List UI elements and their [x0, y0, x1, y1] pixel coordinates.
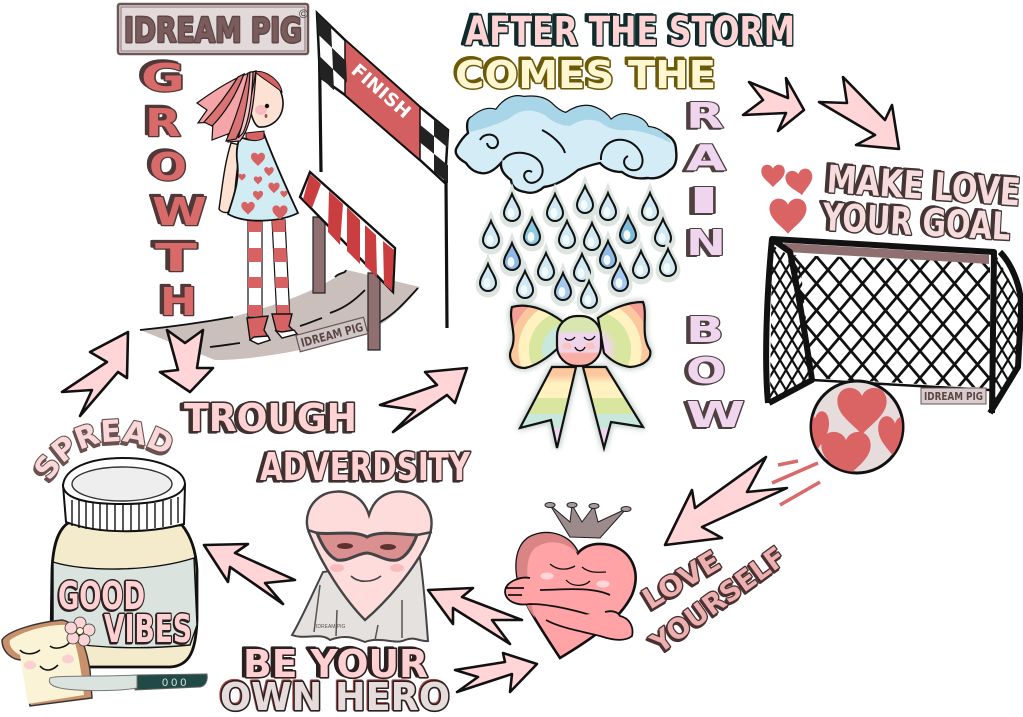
heading: GROWTH vertical letters: H	[160, 280, 197, 324]
jar body	[51, 523, 197, 667]
heading: Spread: SPREAD	[33, 418, 173, 484]
arrow: love to hero upper	[428, 588, 522, 644]
toast	[2, 617, 95, 706]
heading: RAINBOW vertical letters: A	[686, 138, 726, 179]
arrow: rainbow to goal 1	[743, 78, 804, 131]
jar text: good vibes: GOOD	[58, 574, 145, 618]
small logo on goal: IDREAM PIG	[924, 390, 983, 403]
hugging arms	[505, 578, 632, 640]
road	[140, 270, 420, 360]
cape folds	[314, 585, 402, 640]
heading: GROWTH vertical letters: W	[152, 190, 207, 234]
heading: RAINBOW vertical letters: O	[686, 351, 726, 392]
arrow: growth to trough	[160, 330, 213, 392]
masked hero heart	[292, 491, 432, 642]
heart face	[540, 564, 610, 588]
arrow: ball to heart	[665, 457, 787, 545]
girl hair	[197, 71, 256, 142]
heading: RAINBOW vertical letters	[686, 96, 745, 436]
speed lines	[772, 461, 820, 505]
face details	[330, 564, 404, 581]
cape	[292, 558, 428, 642]
knife: 000	[162, 677, 189, 689]
girl head	[249, 72, 283, 127]
girl shoes	[247, 314, 297, 344]
crown	[545, 502, 631, 538]
logo: IDream Pig	[118, 4, 308, 54]
girl dress	[228, 131, 298, 221]
jar of good vibes	[51, 458, 197, 667]
knife	[49, 674, 207, 691]
finish banner	[317, 13, 448, 183]
hearts	[761, 165, 815, 234]
mask	[308, 530, 432, 560]
tiny logo on cape: IDREAM PIG	[316, 624, 346, 630]
arrow: spread to growth	[62, 332, 128, 416]
finish poles	[319, 15, 447, 328]
rainbow bow	[510, 302, 650, 448]
flower	[65, 617, 95, 646]
finish banner: FINISH	[347, 60, 415, 123]
jar label	[53, 558, 197, 648]
heading: Love yourself: YOURSELF	[644, 540, 792, 660]
crossbar	[784, 243, 989, 264]
heart body	[517, 533, 636, 658]
heading: Be your own hero	[220, 642, 450, 717]
small logo on goal	[921, 388, 986, 404]
soccer ball	[810, 380, 904, 474]
goal frame	[766, 239, 1021, 413]
bow knot with face	[557, 316, 601, 366]
heading: GROWTH vertical letters	[141, 56, 207, 324]
heading: Trough adversity	[184, 396, 470, 489]
cloud	[456, 96, 676, 193]
jar text: good vibes	[58, 574, 192, 651]
girl legs	[248, 220, 290, 317]
heading: GROWTH vertical letters: G	[141, 56, 185, 100]
heading: Trough adversity: TROUGH	[184, 396, 357, 440]
logo: IDream Pig: IDREAM PIG	[124, 11, 302, 51]
heading: Be your own hero: BE YOUR	[243, 642, 428, 686]
girl figure	[197, 71, 298, 344]
heading: RAINBOW vertical letters: W	[686, 395, 745, 436]
heading: Trough adversity: ADVERDSITY	[260, 445, 470, 489]
heading: Love yourself: LOVE	[637, 544, 726, 616]
heading: RAINBOW vertical letters: N	[686, 223, 726, 264]
logo: IDream Pig: ©	[299, 7, 308, 21]
heading: RAINBOW vertical letters: I	[686, 181, 722, 222]
arrow: rainbow to goal 2	[819, 77, 899, 149]
arrow: adversity to storm	[380, 368, 467, 432]
jar lid	[63, 458, 185, 531]
heading: GROWTH vertical letters: T	[155, 236, 197, 280]
heading: After the storm: AFTER THE STORM	[465, 9, 795, 55]
goal net back	[787, 255, 990, 388]
arrow: hero to love lower	[455, 653, 537, 692]
heading: GROWTH vertical letters: O	[149, 145, 187, 189]
soccer goal	[766, 239, 1021, 413]
heart	[307, 491, 432, 620]
heading: RAINBOW vertical letters: R	[686, 96, 724, 137]
heading: Make love your goal	[821, 157, 1022, 249]
girl arm	[219, 143, 240, 213]
barrier	[300, 172, 395, 350]
bow wings	[510, 302, 650, 368]
arrow: hero to jar	[204, 544, 295, 604]
small logo on road: IDREAM PIG	[299, 320, 365, 350]
hugging heart with crown	[505, 502, 636, 658]
heading: Comes the: COMES THE	[455, 53, 716, 97]
jar text: good vibes: VIBES	[104, 607, 192, 651]
arrows	[62, 77, 899, 692]
heading: GROWTH vertical letters: R	[145, 101, 181, 145]
raindrops	[480, 186, 676, 310]
heading: RAINBOW vertical letters: B	[686, 310, 724, 351]
goal net sides	[770, 245, 812, 400]
bow tails	[520, 367, 643, 448]
